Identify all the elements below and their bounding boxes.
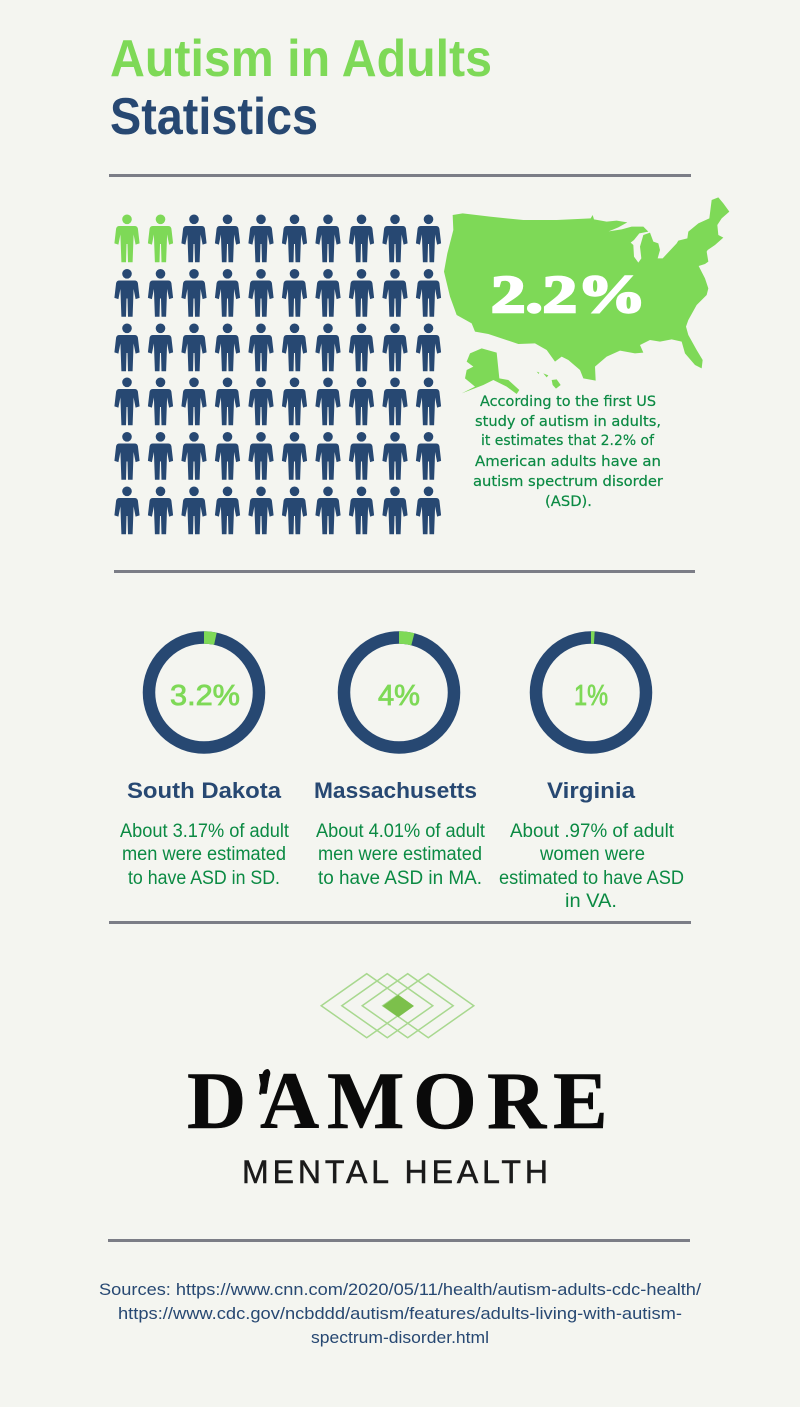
map percentage: 2.2% <box>491 266 646 324</box>
donut: 3.2% <box>149 638 259 748</box>
sources: spectrum-disorder.html <box>311 1328 489 1347</box>
sources: https://www.cdc.gov/ncbddd/autism/features/adults-living-with-autism- <box>118 1304 682 1323</box>
title <box>110 30 492 146</box>
panel: Massachusetts: 4% <box>378 680 420 712</box>
title: Autism in Adults <box>110 30 492 88</box>
logo: D'Amore Mental Health: D'AMORE <box>187 1055 608 1146</box>
panel: Virginia: estimated to have ASD <box>499 868 684 889</box>
panel: Massachusetts: About 4.01% of adult <box>316 821 486 842</box>
sources <box>99 1280 701 1347</box>
US statistic description <box>473 394 663 510</box>
donut: 1% <box>536 638 646 748</box>
panel: South Dakota: About 3.17% of adult <box>120 821 290 842</box>
panel: South Dakota <box>120 638 290 889</box>
panel: Virginia <box>499 638 684 912</box>
panel: Virginia: About .97% of adult <box>510 821 675 842</box>
Hawaii <box>537 372 561 389</box>
panel: South Dakota: men were estimated <box>122 844 286 865</box>
donut: 4% <box>344 638 454 748</box>
panel: Massachusetts: men were estimated <box>318 844 482 865</box>
pictogram: 2 in 100 adults highlighted <box>114 214 441 534</box>
icon: nested diamonds <box>321 974 474 1038</box>
panel: South Dakota: to have ASD in SD. <box>128 868 280 889</box>
US statistic description: study of autism in adults, <box>475 414 661 430</box>
sources: Sources: https://www.cnn.com/2020/05/11/health/autism-adults-cdc-health/ <box>99 1280 701 1299</box>
panel: Massachusetts <box>314 638 486 889</box>
US statistic description: it estimates that 2.2% of <box>481 433 655 449</box>
logo: D'Amore Mental Health: MENTAL HEALTH <box>242 1154 548 1190</box>
US map <box>444 197 729 394</box>
panel: Massachusetts: Massachusetts <box>314 778 477 803</box>
US statistic description: (ASD). <box>545 494 592 510</box>
panel: Virginia: 1% <box>574 680 608 712</box>
Alaska <box>462 348 519 394</box>
US statistic description: American adults have an <box>475 454 661 470</box>
panel: Virginia: in VA. <box>565 891 617 912</box>
panel: Virginia: women were <box>539 844 645 865</box>
logo: D'Amore Mental Health <box>187 974 608 1190</box>
US statistic description: autism spectrum disorder <box>473 474 663 490</box>
panel: Massachusetts: to have ASD in MA. <box>318 868 482 889</box>
panel: South Dakota: 3.2% <box>170 680 240 712</box>
panel: Virginia: Virginia <box>547 778 636 803</box>
title: Statistics <box>110 88 318 146</box>
US statistic description: According to the first US <box>480 394 656 410</box>
panel: South Dakota: South Dakota <box>127 778 282 803</box>
